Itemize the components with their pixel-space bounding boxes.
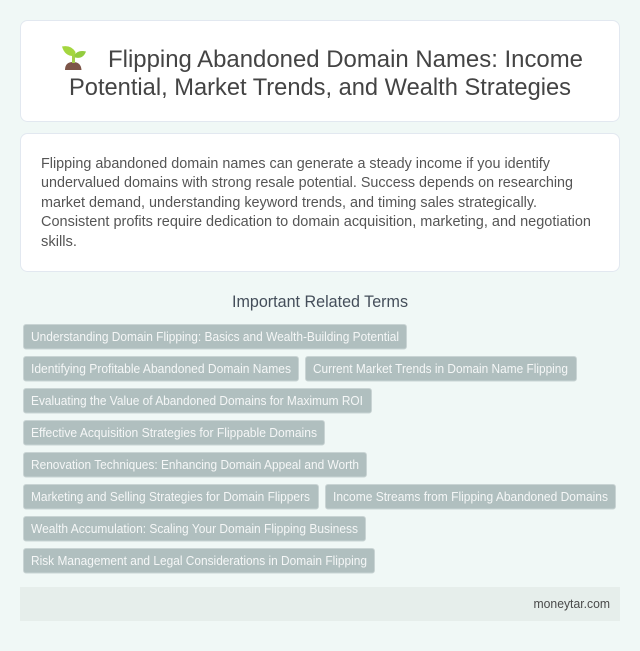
tag 7 [24, 484, 318, 509]
heading: important related terms: Important Related Terms [232, 293, 408, 311]
tag 8 [326, 484, 616, 509]
panel: intro paragraph [20, 134, 620, 272]
tag 9: Wealth Accumulation: Scaling Your Domain Flipping Business [31, 522, 358, 536]
footer source: moneytar.com [534, 596, 610, 611]
footer bar [20, 587, 620, 621]
text block: intro: Flipping abandoned domain names can generate a steady income if you identify [41, 155, 550, 172]
tag 9 [24, 516, 366, 541]
tag 5 [24, 420, 324, 445]
tag list [24, 324, 616, 573]
icon: sprout [62, 46, 86, 70]
tag 1: Understanding Domain Flipping: Basics and Wealth-Building Potential [31, 330, 399, 344]
text block: intro: undervalued domains with strong resale potential. Success depends on researching [41, 174, 573, 191]
tag 2 [24, 356, 298, 381]
title: Flipping Abandoned Domain Names: Income [108, 46, 583, 73]
tag 10: Risk Management and Legal Considerations in Domain Flipping [31, 554, 367, 568]
tag 7: Marketing and Selling Strategies for Domain Flippers [31, 490, 310, 504]
text block: intro: Consistent profits require dedication to domain acquisition, marketing, and negotiation [41, 213, 591, 230]
tag 5: Effective Acquisition Strategies for Flippable Domains [31, 426, 317, 440]
text block: intro: skills. [41, 233, 77, 250]
tag 3: Current Market Trends in Domain Name Flipping [313, 362, 568, 376]
text block: intro: market demand, understanding keyword trends, and timing sales strategically. [41, 194, 537, 211]
tag 3 [306, 356, 576, 381]
tag 10 [24, 548, 374, 573]
tag 6: Renovation Techniques: Enhancing Domain Appeal and Worth [31, 458, 359, 472]
title: Potential, Market Trends, and Wealth Strategies [69, 74, 571, 101]
tag 2: Identifying Profitable Abandoned Domain Names [31, 362, 291, 376]
tag 6 [24, 452, 366, 477]
panel: title card [20, 20, 620, 122]
tag 1 [24, 324, 406, 349]
tag 4 [24, 388, 372, 413]
title [69, 46, 583, 101]
tag 8: Income Streams from Flipping Abandoned Domains [333, 490, 608, 504]
tag 4: Evaluating the Value of Abandoned Domains for Maximum ROI [31, 394, 363, 408]
text block: intro [41, 155, 591, 250]
